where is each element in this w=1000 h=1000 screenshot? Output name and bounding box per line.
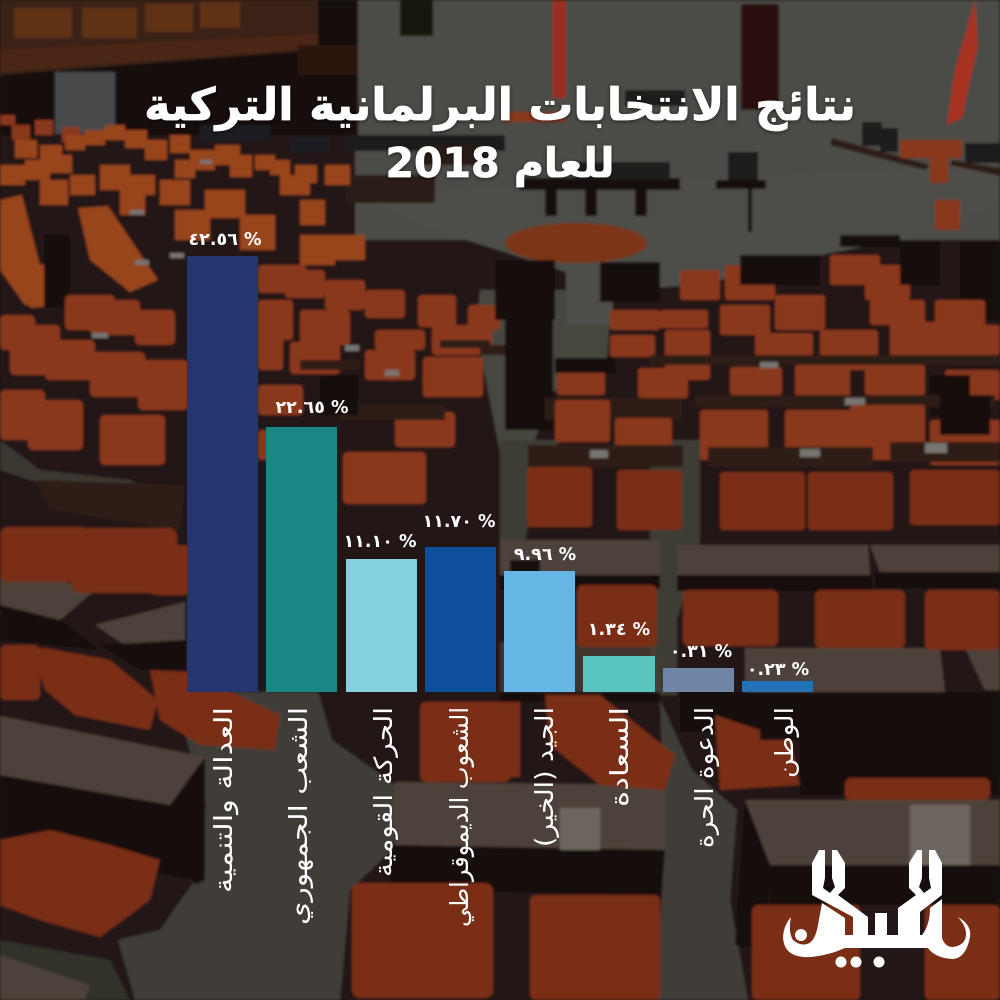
bar: Justice and Development: العدالة والتنمية — [209, 707, 239, 893]
bar: Felicity — [583, 620, 655, 807]
title — [144, 79, 856, 188]
large foreground seats — [0, 527, 1000, 1000]
seated figures, right foreground — [510, 395, 990, 740]
bar chart: party results — [187, 230, 813, 927]
mid rows of seats, left and centre — [0, 160, 555, 530]
balcony at top left — [0, 0, 358, 135]
seats and desks, right side — [527, 200, 1000, 530]
title: للعام 2018 — [385, 139, 615, 188]
bar: Republican People's: ٢٢.٦٥ % — [276, 398, 348, 418]
bar: Nationalist Movement: ١١.١٠ % — [344, 532, 416, 552]
bar: Good (Iyi) — [504, 545, 576, 847]
bar: Free Cause: الدعوة الحرة — [690, 707, 719, 848]
large foreground desks — [0, 540, 1000, 1000]
wall behind the podium — [355, 0, 1000, 290]
bar: Republican People's: الشعب الجمهوري — [284, 707, 314, 925]
bar: Free Cause — [663, 642, 734, 848]
floor areas — [0, 290, 748, 1000]
small distant seats at upper left — [0, 115, 365, 308]
bar: Good (Iyi): الجيد (الخير) — [530, 707, 559, 847]
bar: Justice and Development: ٤٢.٥٦ % — [188, 230, 262, 250]
bar: Peoples' Democratic — [422, 512, 496, 927]
presidency desk, speaker and flowers — [345, 90, 1000, 325]
bar: Homeland: الوطن — [770, 707, 799, 778]
bar: Felicity: السعادة — [605, 707, 634, 807]
bar: Republican People's — [266, 398, 348, 925]
title: نتائج الانتخابات البرلمانية التركية — [144, 79, 856, 131]
bar: Homeland: ٠.٢٣ % — [747, 660, 809, 680]
bar: Peoples' Democratic: ١١.٧٠ % — [422, 512, 496, 532]
bar: Free Cause: ٠.٣١ % — [670, 642, 732, 662]
bar: Nationalist Movement — [344, 532, 417, 877]
bar: Good (Iyi): ٩.٩٦ % — [514, 545, 576, 565]
bar: Homeland — [742, 660, 813, 778]
logo: Al Bayan — [783, 850, 970, 968]
bar: Nationalist Movement: الحركة القومية — [369, 707, 398, 877]
bar: Peoples' Democratic: الشعوب الديموقراطي — [445, 707, 474, 927]
bar: Felicity: ١.٣٤ % — [588, 620, 650, 640]
bar: Justice and Development — [187, 230, 262, 893]
logo: Al Bayan: البيان — [864, 935, 890, 949]
